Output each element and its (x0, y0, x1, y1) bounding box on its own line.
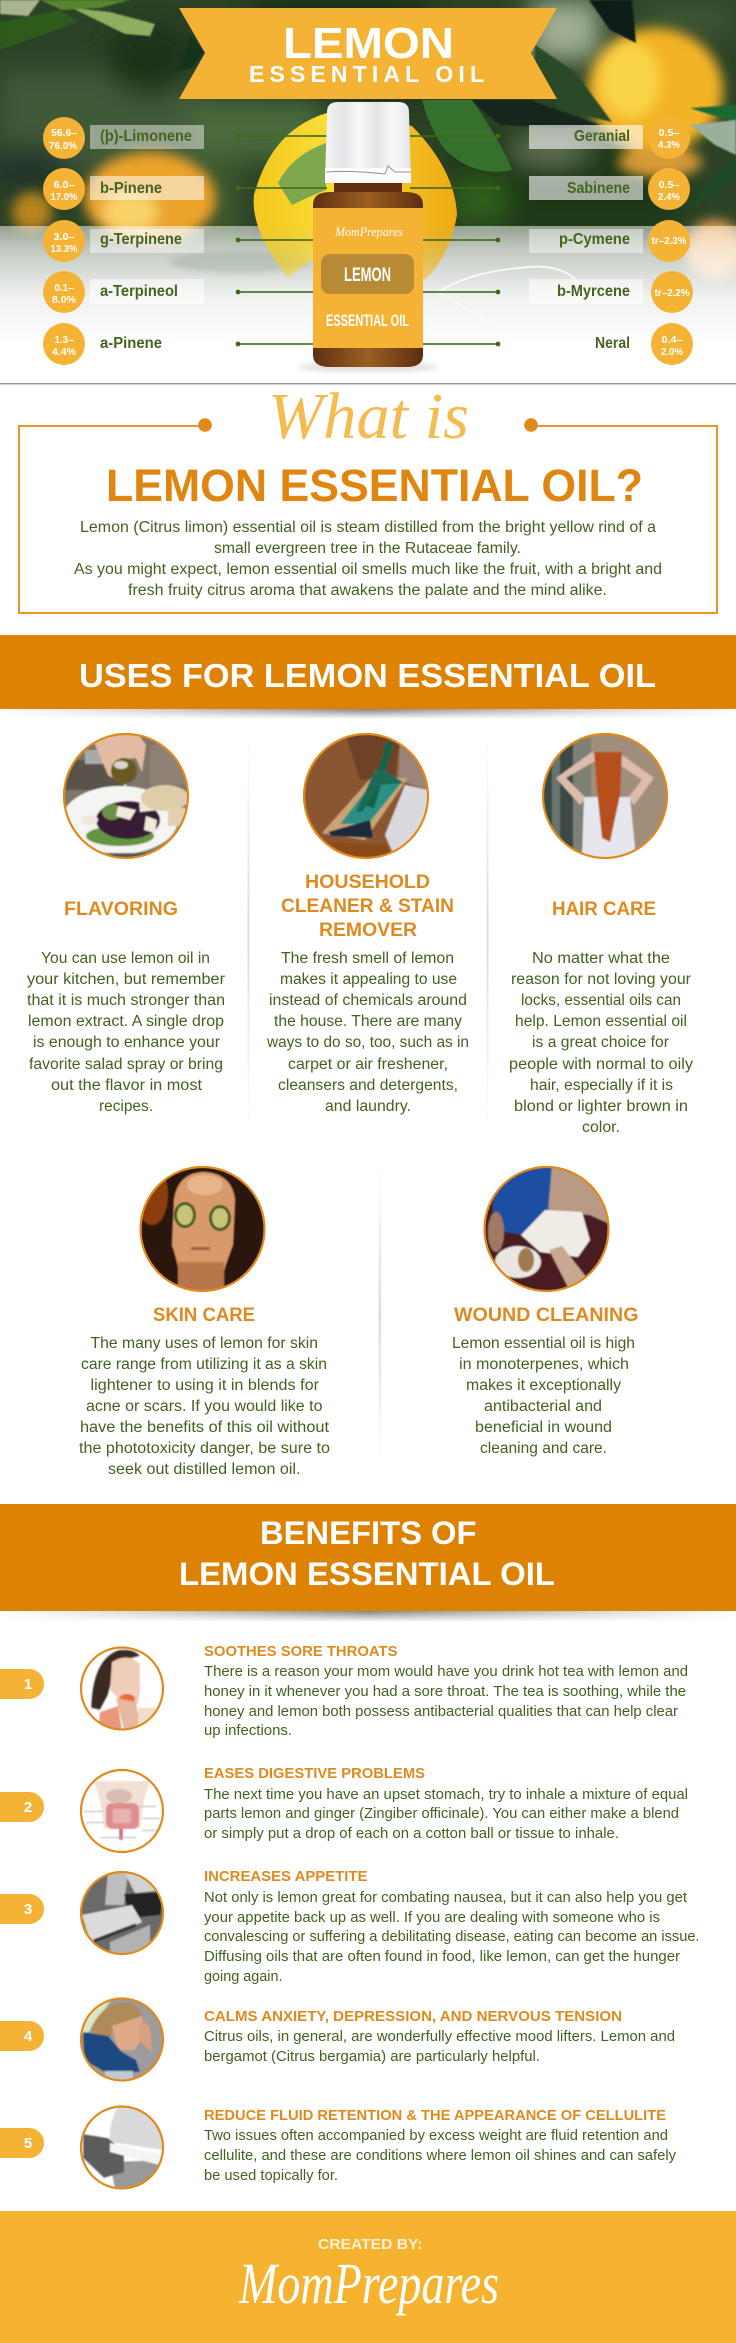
number tab 4 (0, 2021, 44, 2051)
connector lines (236, 134, 500, 346)
left percentage circles: 0.1– (54, 282, 74, 294)
left compound labels: b-Pinene (100, 180, 162, 197)
title: household cleaner: HOUSEHOLD (305, 872, 430, 893)
right compound labels: Geranial (574, 128, 630, 145)
text (204, 1890, 700, 1985)
banner: LEMON (283, 19, 454, 68)
text: or simply put a drop of each on a cotton ball or tissue to inhale. (204, 1826, 619, 1842)
text: honey in it whenever you had a sore throat. The tea is soothing, while the (204, 1684, 686, 1700)
text (204, 2128, 677, 2184)
text: flavoring: lemon extract. A single drop (28, 1013, 224, 1030)
title: EASES DIGESTIVE PROBLEMS (204, 1765, 425, 1782)
text: There is a reason your mom would have you drink hot tea with lemon and (204, 1664, 688, 1680)
hero background photo (0, 0, 736, 320)
lemon behind bottle (254, 100, 512, 280)
text: flavoring: out the flavor in most (51, 1077, 203, 1094)
left percentage circles: 17.0% (50, 191, 78, 203)
text: wound cleaning: beneficial in wound (475, 1419, 612, 1436)
text: Not only is lemon great for combating nausea, but it can also help you get (204, 1890, 687, 1906)
benefits band: LEMON ESSENTIAL OIL (179, 1556, 555, 1592)
title: household cleaner: CLEANER & STAIN (281, 896, 454, 917)
left compound labels: g-Terpinene (100, 231, 182, 248)
benefits band: BENEFITS OF (260, 1515, 476, 1551)
text: skin care (79, 1335, 330, 1478)
right percentage circles: 2.4% (658, 191, 681, 203)
photo: appetite (81, 1872, 165, 1955)
right compound labels: b-Myrcene (557, 283, 630, 300)
right compound labels (529, 125, 643, 352)
text: convalescing or suffering a debilitating disease, eating can become an issue. (204, 1929, 700, 1945)
photo: digestive system (81, 1769, 163, 1852)
number tab 2 (0, 1792, 44, 1822)
right percentage circles: 0.5– (658, 127, 680, 139)
benefit 5 (0, 2106, 677, 2190)
what is script heading: What is (268, 380, 469, 453)
text: bergamot (Citrus bergamia) are particularly helpful. (204, 2049, 540, 2065)
footer: MomPrepares (238, 2251, 499, 2316)
title: flavoring: FLAVORING (64, 899, 178, 920)
text: hair care: reason for not loving your (511, 971, 691, 988)
text: hair care: locks, essential oils can (521, 992, 681, 1009)
left compound labels: (þ)-Limonene (100, 128, 192, 145)
benefits band (0, 1504, 736, 1622)
number tab 1 (0, 1669, 44, 1699)
footer: CREATED BY: (318, 2236, 422, 2253)
column dividers (248, 725, 488, 1470)
left compound labels: a-Pinene (100, 335, 162, 352)
fade to white (0, 226, 736, 384)
description: As you might expect, lemon essential oil smells much like the fruit, with a bright and (74, 561, 662, 578)
text: household cleaner: and laundry. (325, 1098, 411, 1115)
number tab 2: 2 (24, 1799, 32, 1816)
left percentage circles: 4.4% (52, 346, 77, 358)
right compound labels: p-Cymene (559, 231, 630, 248)
text: skin care: have the benefits of this oil without (80, 1419, 330, 1436)
right percentage circles: tr–2.3% (652, 235, 687, 247)
number tab 3 (0, 1894, 44, 1924)
left percentage circles: 8.0% (52, 294, 77, 306)
title: hair care: HAIR CARE (552, 899, 656, 920)
text: wound cleaning (452, 1335, 635, 1457)
text: flavoring: recipes. (99, 1098, 153, 1115)
text: wound cleaning: makes it exceptionally (466, 1377, 621, 1394)
text: skin care: acne or scars. If you would like to (86, 1398, 322, 1415)
description: fresh fruity citrus aroma that awakens the palate and the mind alike. (128, 582, 607, 599)
text: household cleaner (266, 950, 469, 1115)
right compound labels: Neral (595, 335, 630, 352)
title: REDUCE FLUID RETENTION & THE APPEARANCE OF CELLULITE (204, 2107, 666, 2124)
photo: bandage (484, 1165, 612, 1295)
photo: anxious woman (81, 1998, 163, 2083)
photo: cucumber mask (136, 1165, 265, 1292)
benefit 4 (0, 1998, 675, 2083)
text: household cleaner: The fresh smell of lemon (281, 950, 454, 967)
right percentage circles: 0.4– (662, 334, 683, 346)
footer (0, 2211, 736, 2343)
text: hair care: hair, especially if it is (530, 1077, 673, 1094)
text: up infections. (204, 1723, 292, 1739)
left percentage circles: 76.0% (49, 140, 78, 152)
left percentage circles (43, 117, 85, 365)
right percentage circles: tr–2.2% (654, 287, 690, 299)
text: skin care: the phototoxicity danger, be sure to (79, 1440, 330, 1457)
text: wound cleaning: in monoterpenes, which (459, 1356, 629, 1373)
text: be used topically for. (204, 2168, 338, 2184)
text: flavoring: that it is much stronger than (27, 992, 225, 1009)
left compound labels: a-Terpineol (100, 283, 178, 300)
title: skin care: SKIN CARE (153, 1305, 255, 1326)
text: wound cleaning: cleaning and care. (480, 1440, 607, 1457)
text: skin care: lightener to using it in blends for (90, 1377, 319, 1394)
text: going again. (204, 1969, 282, 1985)
text: flavoring: is enough to enhance your (33, 1034, 220, 1051)
benefit 3 (0, 1868, 700, 1985)
text: honey and lemon both possess antibacterial qualities that can help clear (204, 1704, 678, 1720)
use: wound cleaning (452, 1165, 638, 1457)
title: household cleaner (281, 872, 454, 941)
text: household cleaner: cleansers and detergents, (278, 1077, 458, 1094)
number tab 1: 1 (24, 1676, 32, 1693)
number tab 5: 5 (24, 2135, 32, 2152)
text: household cleaner: instead of chemicals around (269, 992, 467, 1009)
right percentage circles: 0.5– (658, 179, 680, 191)
photo: waist measuring (81, 2106, 163, 2190)
essential oil bottle: MomPrepares (334, 224, 403, 239)
text: flavoring (27, 950, 225, 1115)
essential oil bottle: ESSENTIAL OIL (326, 311, 409, 330)
description: small evergreen tree in the Rutaceae family. (214, 540, 521, 557)
text: your appetite back up as well. If you are dealing with someone who is (204, 1910, 660, 1926)
right percentage circles (648, 117, 693, 365)
text: skin care: care range from utilizing it as a skin (81, 1356, 327, 1373)
text: hair care (509, 950, 693, 1136)
right percentage circles: 4.3% (658, 139, 681, 151)
right percentage circles: 2.0% (661, 346, 684, 358)
benefit 2 (0, 1765, 688, 1852)
left percentage circles: 13.3% (50, 243, 78, 255)
title: household cleaner: REMOVER (319, 920, 417, 941)
text: wound cleaning: Lemon essential oil is high (452, 1335, 635, 1352)
title: wound cleaning: WOUND CLEANING (454, 1305, 638, 1326)
number tab 4: 4 (24, 2028, 33, 2045)
text: Citrus oils, in general, are wonderfully effective mood lifters. Lemon and (204, 2029, 675, 2045)
number tab 5 (0, 2128, 44, 2158)
title: INCREASES APPETITE (204, 1868, 368, 1885)
text: household cleaner: makes it appealing to use (280, 971, 457, 988)
number tab 3: 3 (24, 1901, 32, 1918)
left percentage circles: 1.3– (54, 334, 74, 346)
photo: salad (62, 734, 190, 859)
text: cellulite, and these are conditions where lemon oil shines and can safely (204, 2148, 677, 2164)
text (204, 2029, 675, 2065)
essential oil bottle (298, 102, 438, 372)
what is panel (19, 380, 717, 613)
text: wound cleaning: antibacterial and (484, 1398, 602, 1415)
benefit 1 (0, 1643, 688, 1739)
banner (179, 8, 557, 99)
text: Two issues often accompanied by excess weight are fluid retention and (204, 2128, 668, 2144)
left percentage circles: 56.6– (51, 127, 77, 139)
right compound labels: Sabinene (567, 180, 630, 197)
text: hair care: color. (582, 1119, 620, 1136)
text: hair care: people with normal to oily (509, 1056, 693, 1073)
title: CALMS ANXIETY, DEPRESSION, AND NERVOUS TENSION (204, 2008, 622, 2025)
left percentage circles: 3.0– (54, 231, 75, 243)
text: flavoring: favorite salad spray or bring (29, 1056, 223, 1073)
photo: mop (304, 734, 428, 858)
text: hair care: No matter what the (532, 950, 670, 967)
text: skin care: The many uses of lemon for skin (90, 1335, 318, 1352)
use: skin care (79, 1165, 330, 1478)
text: skin care: seek out distilled lemon oil. (108, 1461, 300, 1478)
text: hair care: blond or lighter brown in (514, 1098, 688, 1115)
essential oil bottle: LEMON (344, 265, 391, 286)
description: Lemon (Citrus limon) essential oil is steam distilled from the bright yellow rind of a (80, 519, 656, 536)
use: hair care (509, 734, 693, 1136)
banner: ESSENTIAL OIL (249, 61, 484, 87)
text (204, 1664, 688, 1739)
text: household cleaner: carpet or air freshener, (288, 1056, 448, 1073)
text (204, 1787, 688, 1842)
text: flavoring: your kitchen, but remember (27, 971, 225, 988)
uses band: USES FOR LEMON ESSENTIAL OIL (79, 657, 656, 694)
description (74, 519, 662, 599)
heading: lemon essential oil: LEMON ESSENTIAL OIL? (106, 460, 643, 511)
text: The next time you have an upset stomach, try to inhale a mixture of equal (204, 1787, 688, 1803)
use: flavoring (27, 734, 225, 1115)
text: flavoring: You can use lemon oil in (41, 950, 210, 967)
text: Diffusing oils that are often found in food, like lemon, can get the hunger (204, 1949, 680, 1965)
text: household cleaner: ways to do so, too, such as in (266, 1034, 469, 1051)
text: household cleaner: the house. There are many (274, 1013, 462, 1030)
uses band (0, 635, 736, 719)
photo: red hair (543, 734, 667, 858)
text: hair care: help. Lemon essential oil (515, 1013, 687, 1030)
text: hair care: is a great choice for (532, 1034, 669, 1051)
left percentage circles: 6.0– (54, 179, 75, 191)
use: household cleaner (266, 734, 469, 1115)
text: parts lemon and ginger (Zingiber officinale). You can either make a blend (204, 1806, 679, 1822)
photo: sore throat (81, 1647, 165, 1730)
left compound labels (90, 125, 204, 352)
title: SOOTHES SORE THROATS (204, 1643, 398, 1660)
